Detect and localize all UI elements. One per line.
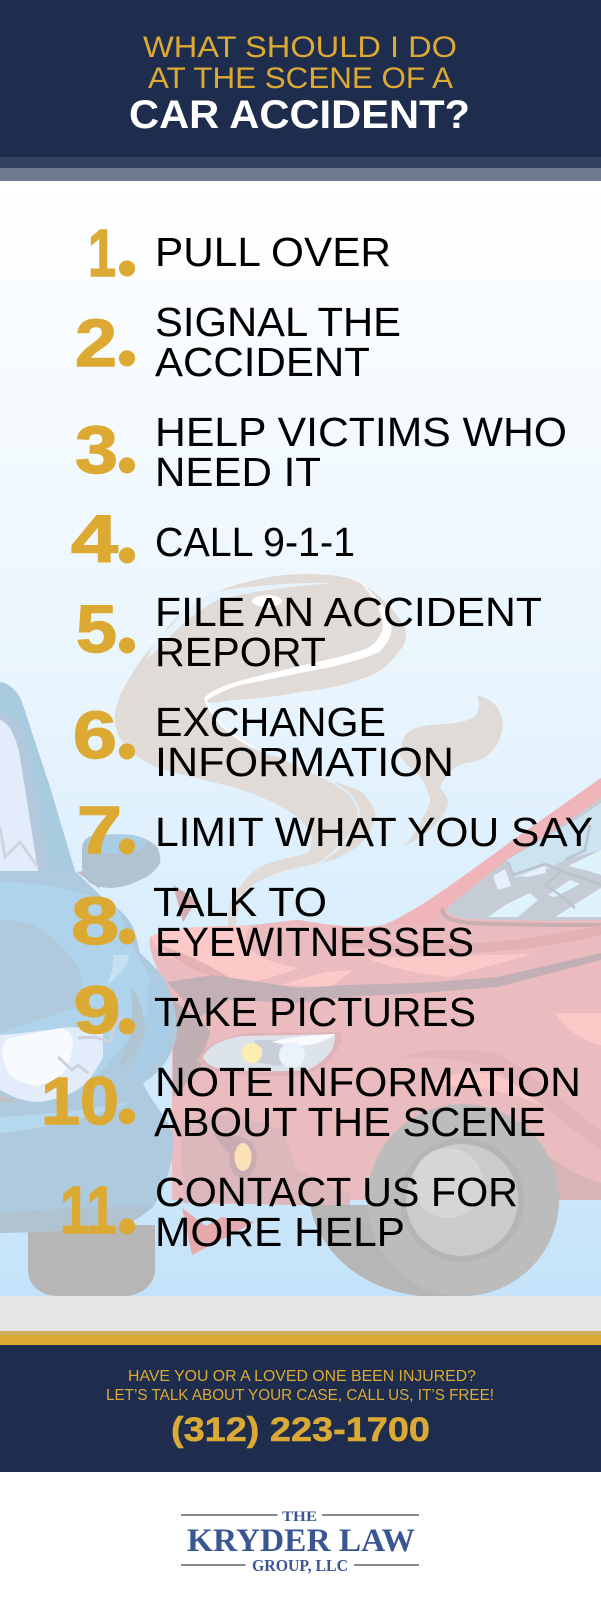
red car torn fragment upper xyxy=(173,885,197,922)
item 6: INFORMATION xyxy=(155,739,454,785)
blue car lower trim highlight xyxy=(0,1102,130,1133)
item 11 xyxy=(60,1144,518,1255)
blue car tire xyxy=(28,1225,155,1296)
item 1: . xyxy=(114,186,140,297)
item 5: FILE AN ACCIDENT xyxy=(155,589,542,635)
item 5: . xyxy=(114,563,140,674)
red car torn bumper fragment xyxy=(182,1208,255,1255)
blue car side mirror xyxy=(77,834,160,889)
red car headlight xyxy=(197,1032,342,1076)
gold divider band xyxy=(0,1331,601,1345)
item 9: . xyxy=(114,944,140,1055)
item 3: 3 xyxy=(75,413,118,488)
item 7 xyxy=(77,764,593,875)
item 7: . xyxy=(114,764,140,875)
title xyxy=(129,31,470,137)
title: AT THE SCENE OF A xyxy=(148,62,453,95)
item 1: 1 xyxy=(88,216,116,291)
item 4: 4 xyxy=(71,502,118,577)
item 5: REPORT xyxy=(155,629,326,675)
logo: The Kryder Law Group: THE xyxy=(282,1509,317,1525)
item 5 xyxy=(76,563,542,675)
item 2: 2 xyxy=(75,306,117,381)
item 8: 8 xyxy=(71,884,119,959)
header panel xyxy=(0,0,601,181)
item 9 xyxy=(74,944,476,1055)
item 2: ACCIDENT xyxy=(155,339,370,385)
item 2: . xyxy=(114,276,140,387)
blue car window crack xyxy=(0,827,38,867)
item 8: . xyxy=(114,854,140,965)
red car right fender highlights xyxy=(555,1013,601,1045)
item 3: . xyxy=(114,383,140,494)
illustration: blue car xyxy=(0,682,177,1296)
item 2 xyxy=(75,276,401,387)
call to action text: HAVE YOU OR A LOVED ONE BEEN INJURED? xyxy=(128,1368,476,1385)
item 8: EYEWITNESSES xyxy=(155,919,474,965)
item 10: 10 xyxy=(41,1064,119,1139)
blue car bumper shade xyxy=(0,1206,153,1233)
item 11: . xyxy=(114,1144,140,1255)
item 5: 5 xyxy=(76,592,117,667)
item 6: EXCHANGE xyxy=(155,699,386,745)
item 3: NEED IT xyxy=(155,449,321,495)
item 9: 9 xyxy=(74,973,120,1048)
blue car pillar xyxy=(0,682,75,885)
item 1 xyxy=(88,186,391,297)
item 7: LIMIT WHAT YOU SAY xyxy=(155,809,593,855)
red car dark hood crease xyxy=(167,953,601,1017)
item 2: SIGNAL THE xyxy=(155,299,401,345)
illustration: car crash scene xyxy=(0,574,601,1296)
panel: sky gradient background xyxy=(0,181,601,1296)
illustration: red car wheel xyxy=(310,1104,559,1296)
panel: road strip xyxy=(0,1296,601,1331)
item 6: 6 xyxy=(73,698,117,773)
logo: The Kryder Law Group: GROUP, LLC xyxy=(252,1556,348,1575)
item 10: ABOUT THE SCENE xyxy=(154,1099,546,1145)
item 8: TALK TO xyxy=(153,879,327,925)
item 3: HELP VICTIMS WHO xyxy=(155,409,567,455)
blue car hood and bumper xyxy=(0,871,177,1233)
call to action text xyxy=(106,1368,494,1404)
item 11: 11 xyxy=(60,1173,116,1248)
illustration: red car xyxy=(150,778,601,1255)
footer call to action panel xyxy=(0,1345,601,1472)
call to action text: LET’S TALK ABOUT YOUR CASE, CALL US, IT’S FREE! xyxy=(106,1387,494,1404)
red car lower bumper xyxy=(180,1113,350,1206)
blue car headlight xyxy=(0,1015,123,1102)
red car body xyxy=(150,778,601,1200)
red car windshield xyxy=(442,798,601,925)
item 3 xyxy=(75,383,567,495)
logo: The Kryder Law Group xyxy=(181,1509,419,1575)
item 4: . xyxy=(114,473,140,584)
item 6 xyxy=(73,669,454,785)
red car roof band xyxy=(383,778,601,925)
item 8 xyxy=(71,854,474,965)
item 11: CONTACT US FOR xyxy=(155,1169,518,1215)
phone number: (312) 223-1700 xyxy=(171,1411,430,1449)
blue car grey lip xyxy=(0,1095,18,1102)
illustration: smoke xyxy=(115,574,503,935)
title: WHAT SHOULD I DO xyxy=(143,31,457,64)
item 1: PULL OVER xyxy=(155,229,391,275)
blue car side window xyxy=(0,720,38,871)
item 10: . xyxy=(114,1034,140,1145)
blue car hood highlight xyxy=(0,882,152,1078)
item 4: CALL 9-1-1 xyxy=(155,519,355,565)
item 7: 7 xyxy=(77,793,122,868)
red car turn signal xyxy=(213,1133,257,1179)
item 9: TAKE PICTURES xyxy=(154,989,476,1035)
item 10: NOTE INFORMATION xyxy=(155,1059,581,1105)
red car hood highlights xyxy=(150,926,300,985)
logo: The Kryder Law Group: KRYDER LAW xyxy=(187,1523,415,1559)
item 11: MORE HELP xyxy=(155,1209,405,1255)
title: CAR ACCIDENT? xyxy=(129,93,470,137)
item 4 xyxy=(71,473,355,584)
item 6: . xyxy=(114,669,140,780)
item 10 xyxy=(41,1034,581,1145)
